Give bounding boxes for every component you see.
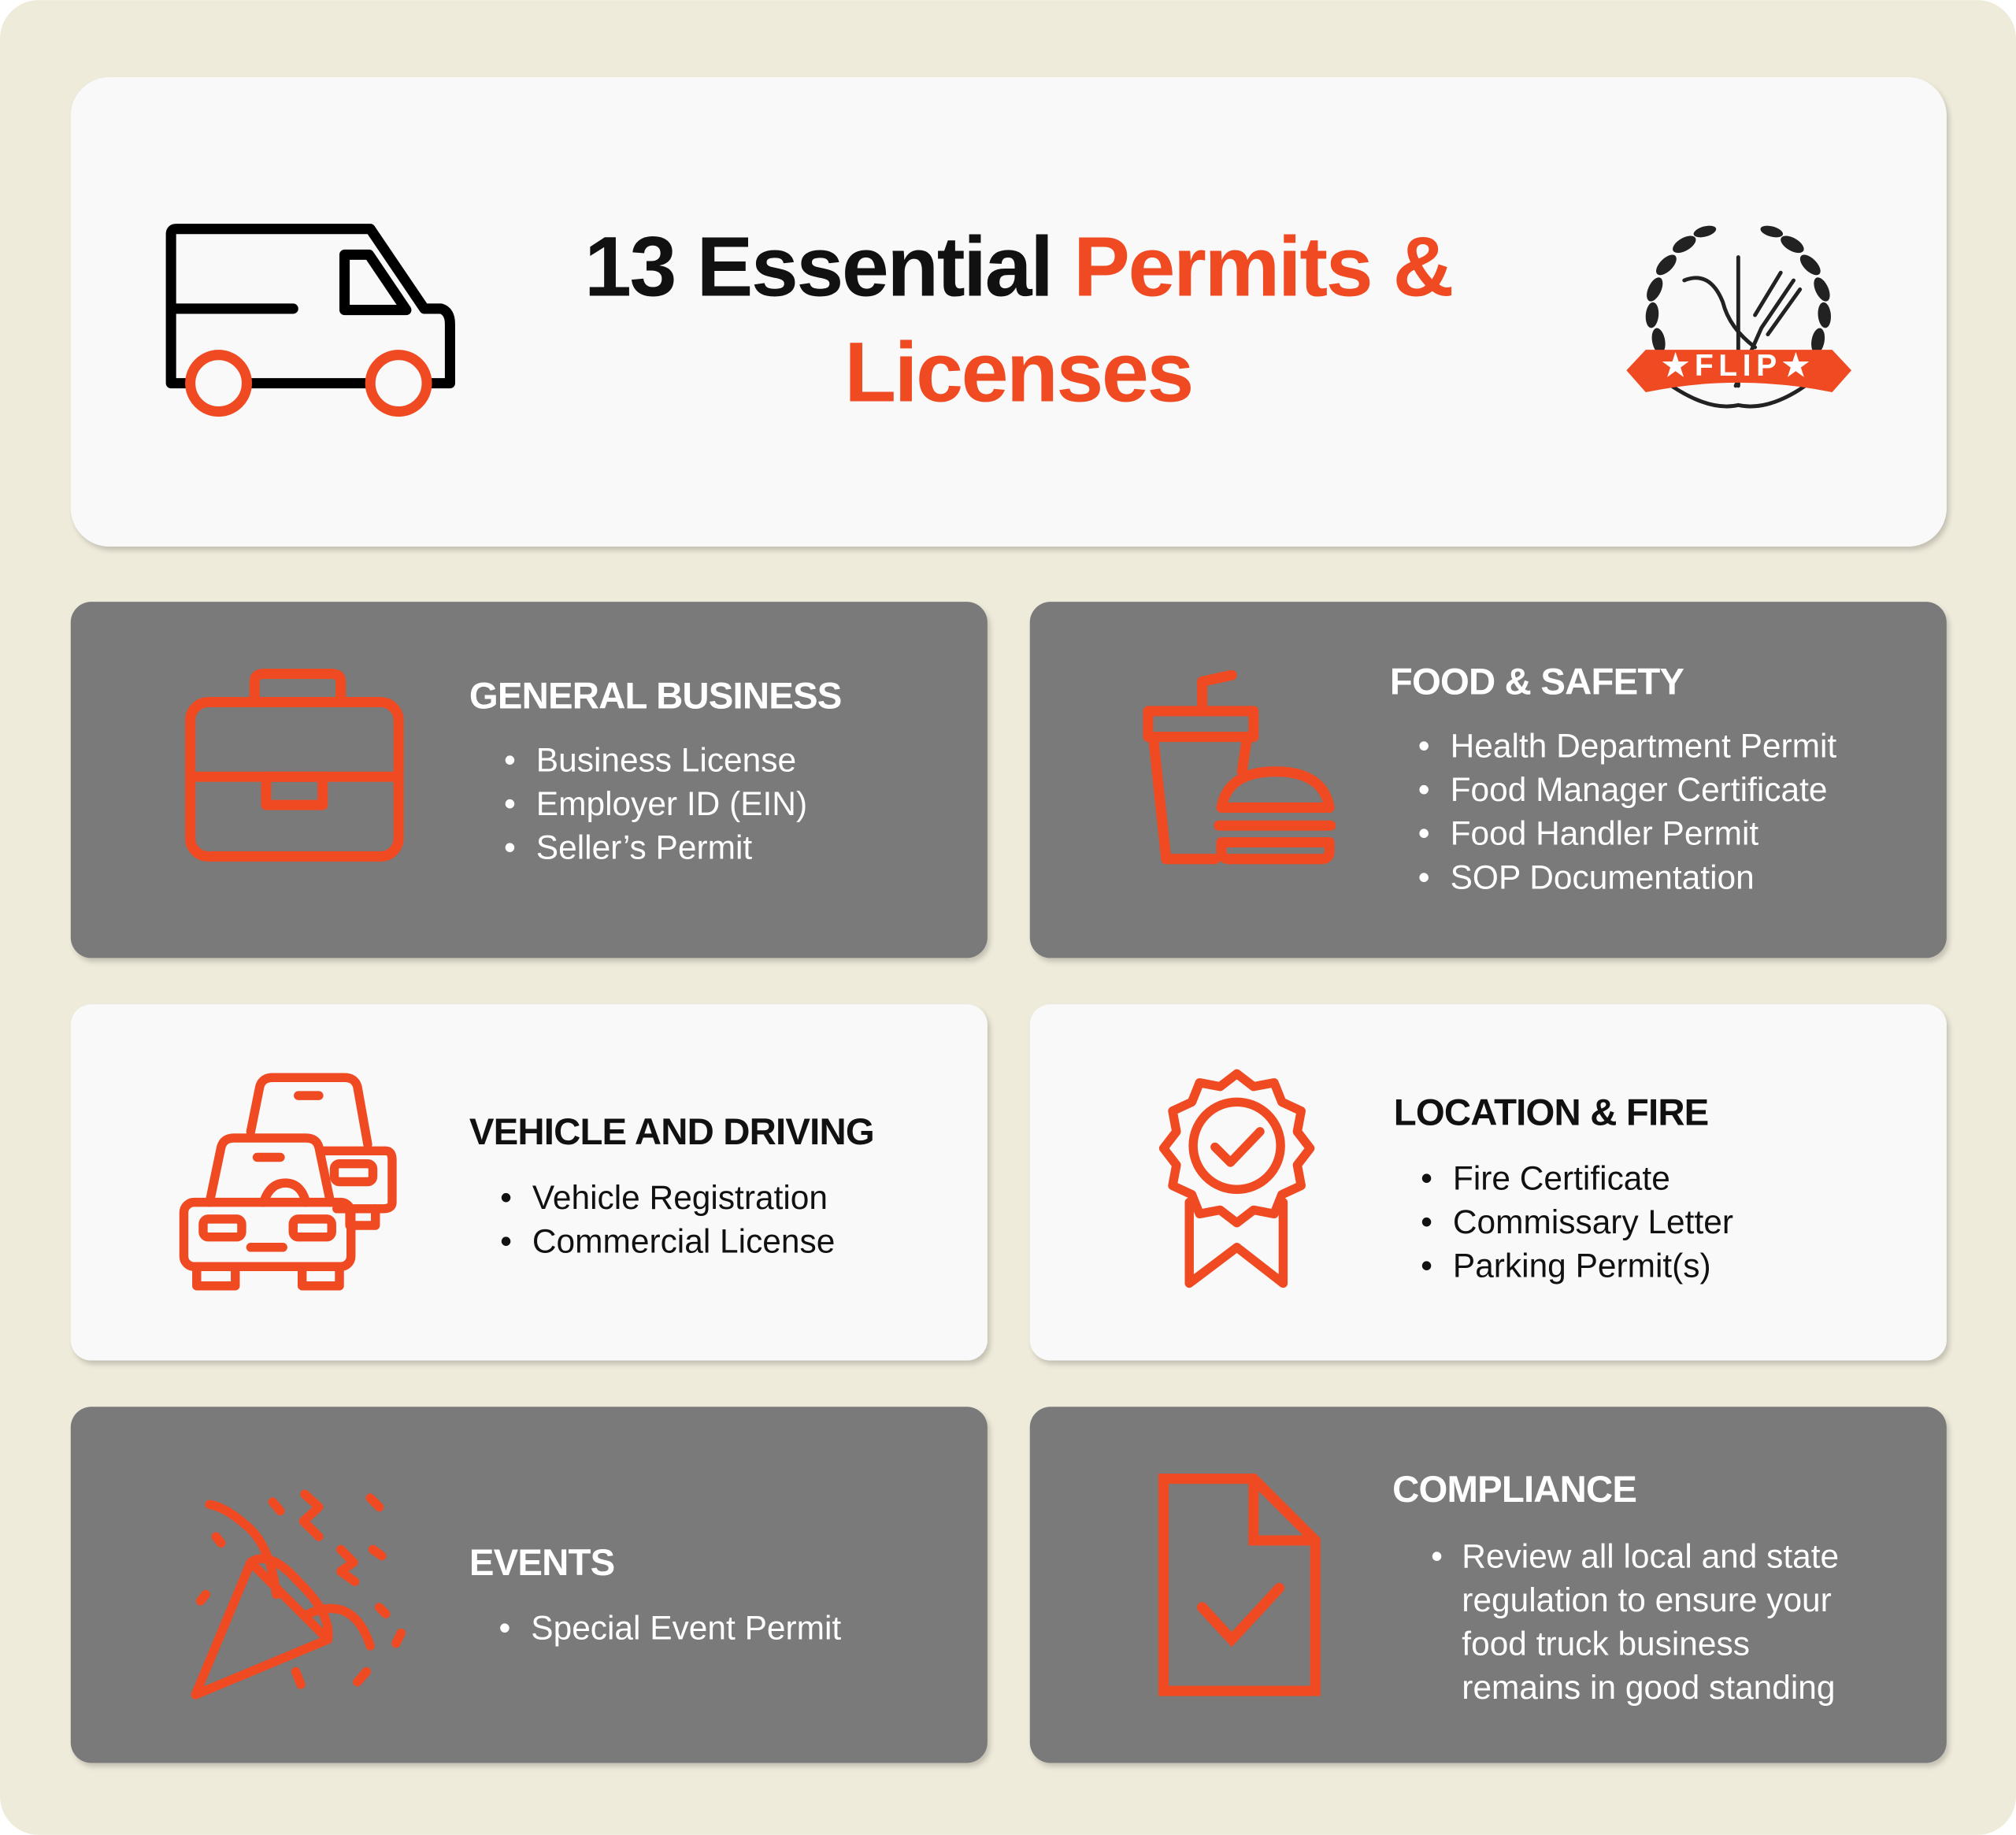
panel: vehicle and driving: Vehicle Registration: [532, 1179, 828, 1216]
panel: location & fire: LOCATION & FIRE: [1394, 1092, 1708, 1134]
panel: food & safety: Health Department Permit: [1451, 728, 1836, 765]
panel: compliance: COMPLIANCE: [1392, 1469, 1636, 1511]
panel: location & fire: Fire Certificate: [1453, 1159, 1670, 1196]
panel: food & safety: [1030, 602, 1947, 958]
icon: briefcase: [191, 674, 398, 856]
header card: [71, 77, 1947, 547]
panel: location & fire: Commissary Letter: [1453, 1203, 1733, 1240]
panel: food & safety: •: [1418, 815, 1430, 852]
icon: drink and burger: [1148, 675, 1331, 859]
logo: FLIP laurel: ★FLIP★: [1662, 349, 1814, 383]
panel: compliance: Review all local and state: [1462, 1537, 1839, 1574]
panel: general business: Employer ID (EIN): [536, 785, 807, 822]
panel: food & safety: Food Handler Permit: [1451, 815, 1758, 852]
panel: events: [71, 1407, 988, 1763]
icon: document check: [1164, 1479, 1315, 1691]
panel: events: EVENTS: [469, 1542, 614, 1584]
panel: food & safety: SOP Documentation: [1451, 858, 1755, 895]
panel: location & fire: •: [1421, 1203, 1432, 1240]
panel: general business: •: [504, 785, 516, 822]
panel: location & fire: Parking Permit(s): [1453, 1247, 1711, 1284]
panel: food & safety: •: [1418, 728, 1430, 765]
panel: general business: •: [504, 742, 516, 779]
panel: location & fire: [1030, 1004, 1947, 1360]
panel: vehicle and driving: [71, 1004, 988, 1360]
panel: vehicle and driving: Commercial License: [532, 1222, 835, 1259]
panel: compliance: [1030, 1407, 1947, 1763]
panel: vehicle and driving: VEHICLE AND DRIVING: [469, 1111, 874, 1153]
panel: location & fire: •: [1421, 1247, 1432, 1284]
panel: vehicle and driving: •: [500, 1179, 512, 1216]
header card: Licenses: [844, 324, 1192, 419]
title: 13 Essential Permits &: [584, 219, 1452, 314]
panel: events: Special Event Permit: [531, 1610, 841, 1647]
panel: compliance: remains in good standing: [1462, 1669, 1836, 1706]
panel: general business: Business License: [536, 742, 796, 779]
panel: food & safety: •: [1418, 858, 1430, 895]
icon: van: [171, 229, 450, 412]
panel: general business: GENERAL BUSINESS: [469, 676, 842, 717]
panel: food & safety: Food Manager Certificate: [1451, 771, 1827, 808]
logo: FLIP laurel: [1626, 224, 1851, 406]
panel: general business: •: [504, 829, 516, 866]
panel: food & safety: •: [1418, 771, 1430, 808]
panel: general business: Seller’s Permit: [536, 829, 752, 866]
panel: location & fire: •: [1421, 1159, 1432, 1196]
panel: events: •: [498, 1610, 510, 1647]
panel: compliance: regulation to ensure your: [1462, 1581, 1832, 1618]
panel: compliance: food truck business: [1462, 1625, 1750, 1662]
panel: vehicle and driving: •: [500, 1222, 512, 1259]
icon: cars: [183, 1077, 392, 1286]
panel: compliance: •: [1431, 1537, 1443, 1574]
panel: general business: [71, 602, 988, 958]
icon: badge: [1164, 1073, 1310, 1283]
icon: party popper: [195, 1494, 401, 1695]
panel: food & safety: FOOD & SAFETY: [1390, 662, 1684, 703]
